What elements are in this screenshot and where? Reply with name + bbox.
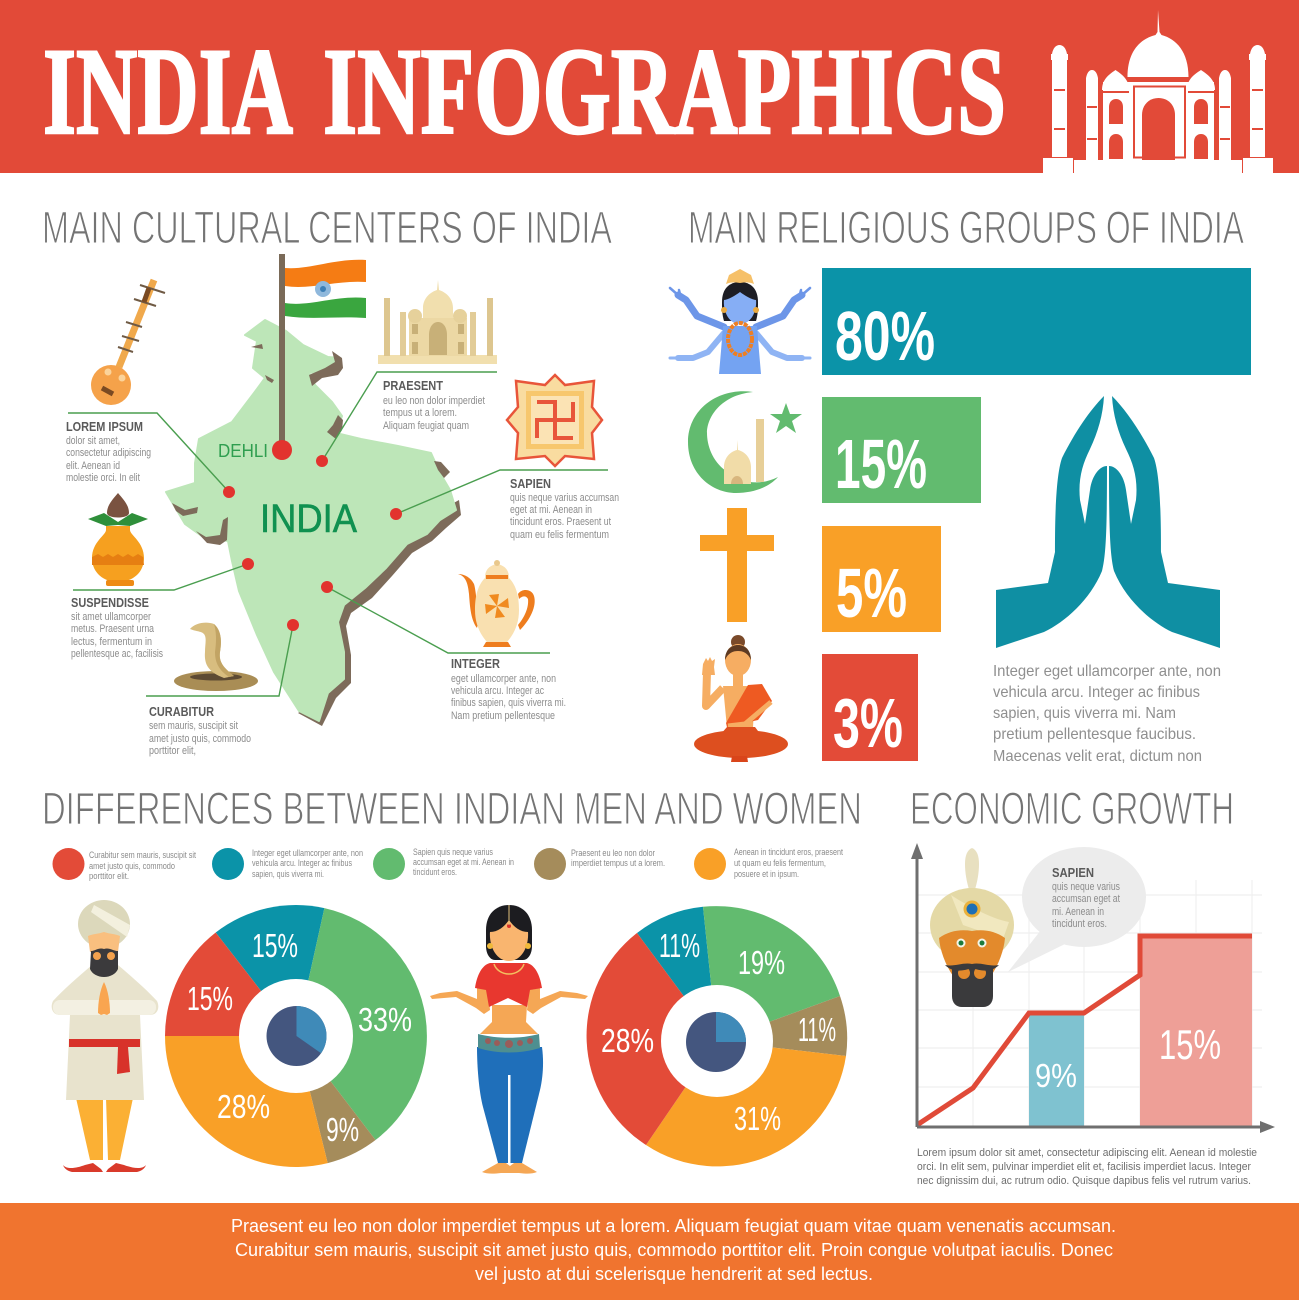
text: religion description: sapien, quis viverra mi. Nam [993, 705, 1176, 722]
panel: cultural centers map [66, 254, 619, 757]
legend: Curabitur sem mauris, suscipit sit [89, 850, 196, 860]
icon: meditating Buddha [694, 635, 788, 762]
bar: 3% [822, 654, 918, 762]
bar: 15%: 15% [1159, 1021, 1221, 1068]
footer banner: Curabitur sem mauris, suscipit sit amet justo quis, commodo porttitor elit. Proin congue volutpat iaculis. Donec [235, 1240, 1113, 1260]
legend: accumsan eget at mi. Aenean in [413, 857, 514, 867]
chart: men pie: 9% [326, 1111, 359, 1148]
legend: Integer eget ullamcorper ante, non [252, 848, 363, 858]
icon: cross [700, 508, 774, 622]
icon: cobra [174, 623, 258, 691]
block: Integer: eget ullamcorper ante, non [451, 673, 556, 685]
callout: speech bubble: quis neque varius [1052, 881, 1120, 893]
legend: Praesent eu leo non dolor [571, 848, 655, 858]
title [43, 23, 1006, 160]
text: economic description [917, 1147, 1257, 1187]
block: Integer: finibus sapien, quis viverra mi. [451, 697, 566, 709]
icon: Hindu deity [670, 269, 810, 374]
icon: sitar [91, 280, 165, 405]
panel: economic growth [911, 843, 1275, 1187]
callout: speech bubble: SAPIEN [1052, 865, 1094, 880]
block: Praesent: PRAESENT [383, 378, 443, 393]
block: Praesent: tempus ut a lorem. [383, 407, 457, 419]
block: Lorem ipsum [66, 419, 151, 484]
bar: 15%: 15% [835, 425, 927, 503]
block: Integer: Nam pretium pellentesque [451, 710, 555, 722]
growth line [917, 936, 1252, 1125]
chart: men pie [165, 905, 427, 1167]
legend: amet justo quis, commodo [89, 861, 175, 871]
label: India: INDIA [260, 497, 357, 541]
block: Integer: vehicula arcu. Integer ac [451, 685, 544, 697]
legend: posuere et in ipsum. [734, 869, 799, 879]
bar: 15% [1140, 936, 1252, 1127]
block: Lorem ipsum: molestie orci. In elit [66, 472, 140, 484]
city dots [223, 440, 402, 631]
chart: women pie: 11% [659, 927, 700, 964]
icon: kalash pot [88, 493, 148, 586]
block: Curabitur [149, 704, 251, 757]
callout: speech bubble: mi. Aenean in [1052, 906, 1104, 918]
bar: 80% [822, 268, 1251, 375]
block: Lorem ipsum: dolor sit amet, [66, 435, 120, 447]
chart: men pie: 28% [217, 1088, 270, 1125]
block: Integer: INTEGER [451, 656, 501, 671]
label: Dehli: DEHLI [218, 441, 268, 461]
footer banner: Praesent eu leo non dolor imperdiet tempus ut a lorem. Aliquam feugiat quam vitae quam venenatis accumsan. [231, 1216, 1116, 1236]
legend [52, 847, 843, 881]
leader lines [68, 372, 608, 696]
legend: imperdiet tempus ut a lorem. [571, 858, 665, 868]
block: Suspendisse: lectus, fermentum in [71, 636, 152, 648]
heading: differences between men and women: DIFFERENCES BETWEEN INDIAN MEN AND WOMEN [42, 783, 862, 834]
bar: 3%: 3% [833, 684, 903, 762]
chart: women pie: 11% [798, 1011, 836, 1048]
title: INFOGRAPHICS [323, 23, 1006, 160]
text: religion description: Maecenas velit erat, dictum non [993, 748, 1202, 765]
block: Praesent: Aliquam feugiat quam [383, 420, 469, 432]
block: Curabitur: amet justo quis, commodo [149, 733, 251, 745]
panel: men and women [52, 847, 847, 1174]
title: INDIA [43, 23, 293, 160]
callout: speech bubble: tincidunt eros. [1052, 918, 1107, 930]
text: economic description: Lorem ipsum dolor sit amet, consectetur adipiscing elit. Aenean id molestie [917, 1147, 1257, 1159]
icon: small Taj Mahal [378, 280, 497, 364]
block: Suspendisse: pellentesque ac, facilisis [71, 648, 163, 660]
heading: main cultural centers: MAIN CULTURAL CENTERS OF INDIA [42, 202, 612, 253]
bar: 5% [822, 526, 941, 632]
bar: 9%: 9% [1035, 1057, 1077, 1094]
grid lines [917, 880, 1262, 1127]
footer banner [0, 1203, 1299, 1300]
block: Sapien: SAPIEN [510, 476, 551, 491]
icon: Indian woman [430, 905, 588, 1174]
block: Lorem ipsum: elit. Aenean id [66, 460, 120, 472]
legend: sapien, quis viverra mi. [252, 869, 324, 879]
legend: porttitor elit. [89, 871, 129, 881]
chart: women pie: 19% [738, 944, 785, 981]
icon: man with turban [930, 848, 1014, 1007]
chart: women pie [587, 906, 847, 1166]
bar: 5%: 5% [836, 554, 907, 632]
block: Curabitur: porttitor elit, [149, 745, 196, 757]
header banner [0, 0, 1299, 173]
legend: Aenean in tincidunt eros, praesent [734, 847, 843, 857]
footer banner: vel justo at dui scelerisque hendrerit at sed lectus. [475, 1264, 873, 1284]
text: religion description: vehicula arcu. Integer ac finibus [993, 684, 1200, 701]
panel: religious groups [670, 268, 1251, 765]
chart: men pie: 15% [187, 980, 233, 1017]
axes [911, 843, 1275, 1133]
block: Lorem ipsum: LOREM IPSUM [66, 419, 143, 434]
icon: Indian flag [279, 254, 366, 450]
legend: tincidunt eros. [413, 867, 457, 877]
bar: 15% [822, 397, 981, 503]
bar: 9% [1029, 1015, 1084, 1127]
callout: speech bubble [1008, 847, 1146, 972]
block: Sapien: quam eu felis fermentum [510, 529, 609, 541]
text: religion description: pretium pellentesque faucibus. [993, 726, 1196, 743]
block: Curabitur: CURABITUR [149, 704, 215, 719]
text: economic description: orci. In elit sem, pulvinar imperdiet elit et, facilisis imperdiet lacus. Integer [917, 1161, 1251, 1173]
legend: Sapien quis neque varius [413, 847, 493, 857]
block: Integer [451, 656, 566, 722]
bar: 80%: 80% [835, 297, 935, 375]
block: Sapien: tincidunt eros. Praesent ut [510, 516, 611, 528]
text: religion description [993, 663, 1221, 765]
callout: speech bubble: accumsan eget at [1052, 893, 1120, 905]
legend: vehicula arcu. Integer ac finibus [252, 858, 352, 868]
block: Suspendisse: SUSPENDISSE [71, 595, 149, 610]
chart: men pie: 33% [358, 1001, 412, 1038]
block: Sapien: eget at mi. Aenean in [510, 504, 592, 516]
block: Suspendisse: sit amet ullamcorper [71, 611, 151, 623]
icon: praying hands [996, 396, 1220, 648]
chart: women pie: 31% [734, 1100, 781, 1137]
block: Sapien: quis neque varius accumsan [510, 492, 619, 504]
map of India [166, 320, 461, 726]
icon: Taj Mahal silhouette [1043, 10, 1273, 173]
chart: women pie: 28% [601, 1022, 654, 1059]
block: Praesent [383, 378, 485, 432]
icon: teapot [458, 560, 535, 647]
block: Curabitur: sem mauris, suscipit sit [149, 720, 238, 732]
block: Suspendisse: metus. Praesent urna [71, 623, 155, 635]
block: Lorem ipsum: consectetur adipiscing [66, 447, 151, 459]
block: Suspendisse [71, 595, 163, 660]
chart: men pie: 15% [252, 927, 298, 964]
icon: crescent, star and mosque [688, 391, 802, 493]
text: religion description: Integer eget ullamcorper ante, non [993, 663, 1221, 680]
block: Praesent: eu leo non dolor imperdiet [383, 395, 485, 407]
icon: sacred emblem [507, 375, 602, 466]
text: economic description: nec dignissim dui, ac rutrum odio. Quisque dapibus felis vel rutrum varius. [917, 1175, 1251, 1187]
block: Sapien [510, 476, 619, 541]
legend: ut quam eu felis fermentum, [734, 858, 826, 868]
icon: Indian man [52, 900, 158, 1172]
